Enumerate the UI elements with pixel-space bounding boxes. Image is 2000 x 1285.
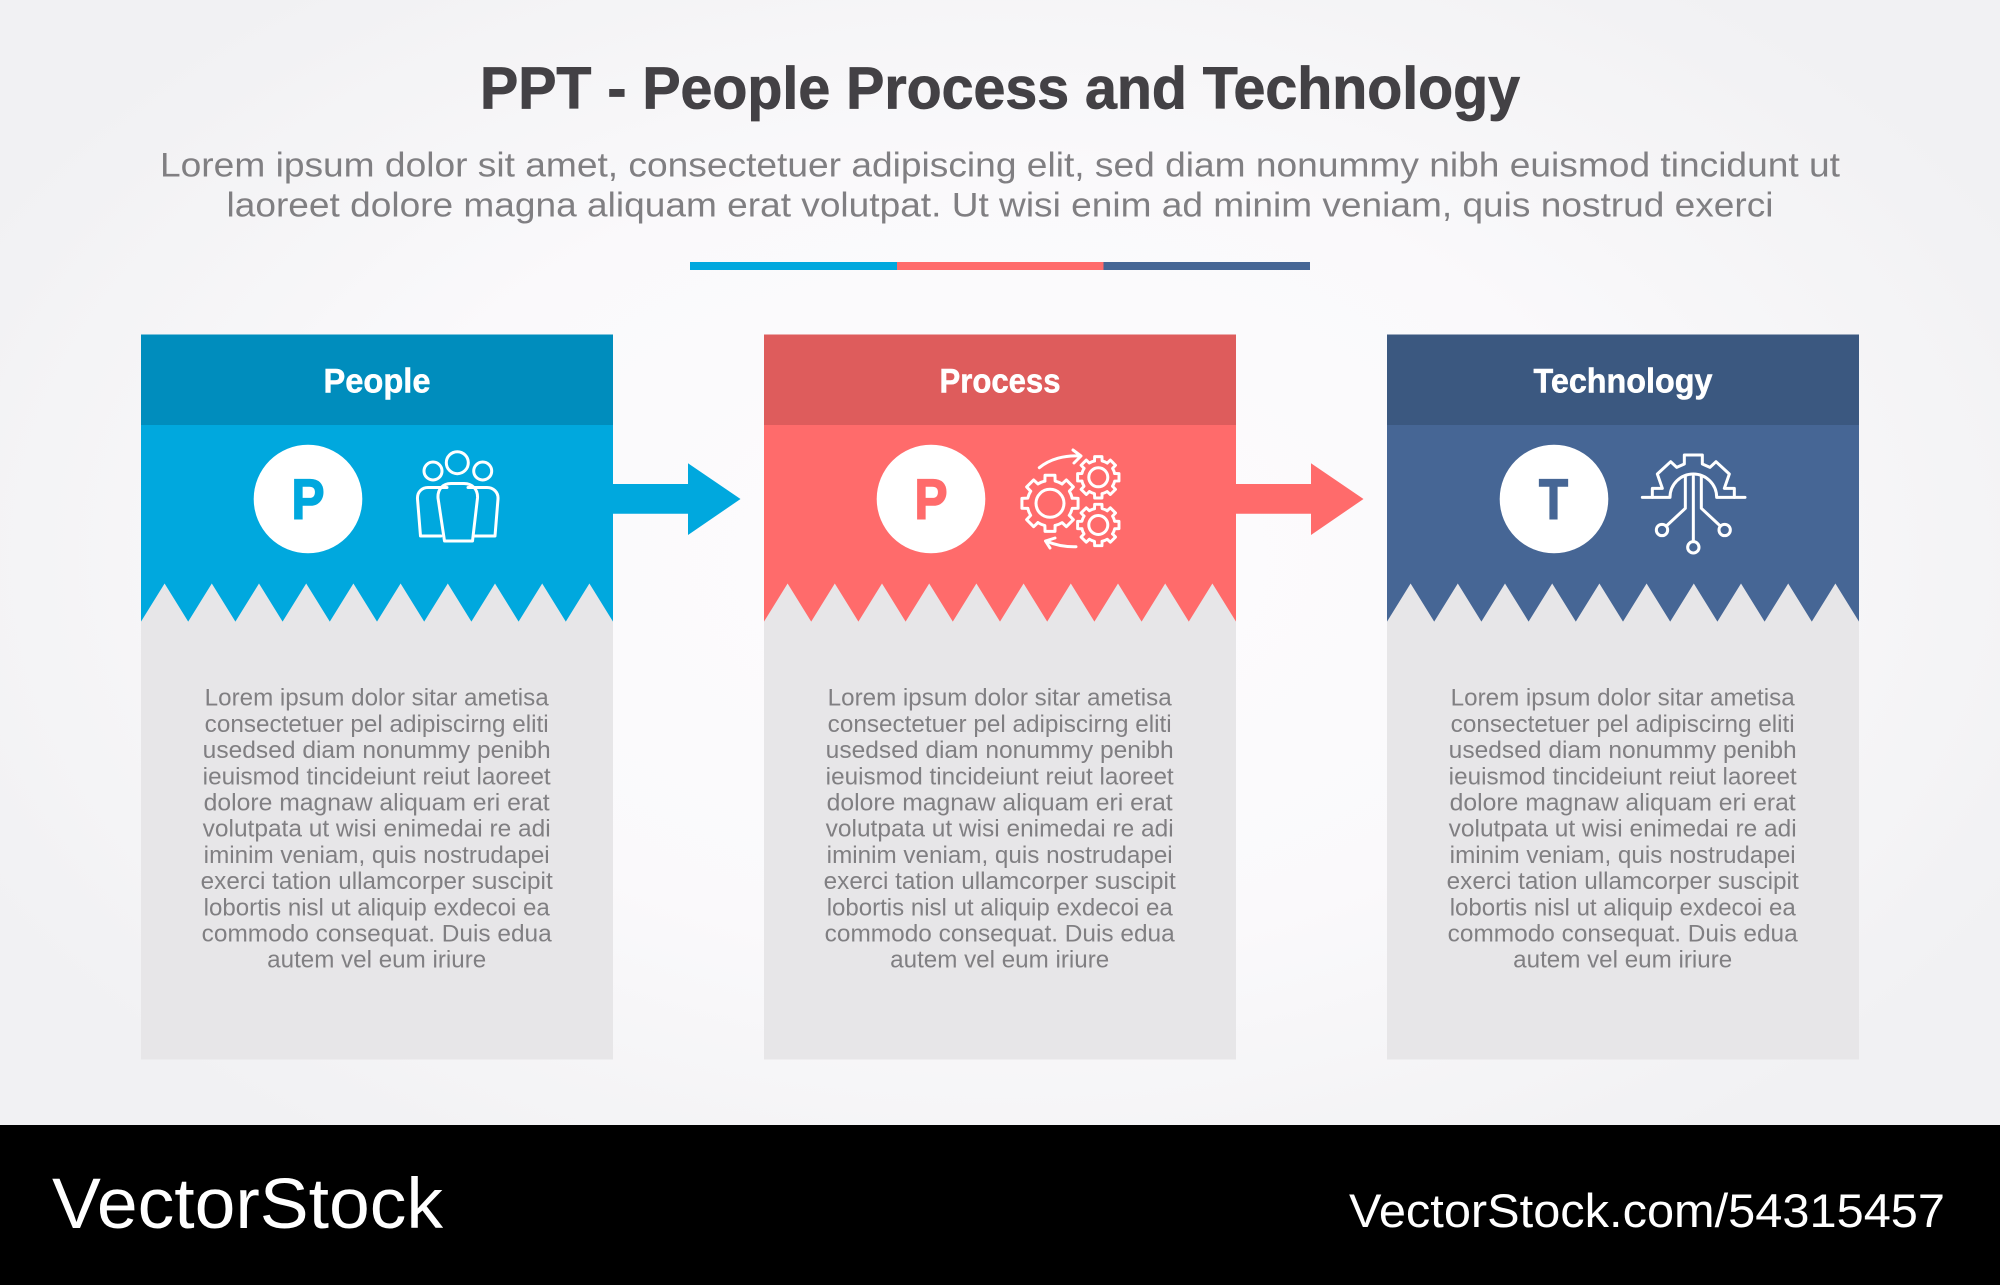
panel: technology: [1387, 334, 1859, 1060]
process body text: Lorem ipsum dolor sitar ametisa: [828, 685, 1172, 712]
people body text: dolore magnaw aliquam eri erat: [204, 790, 550, 816]
technology heading: Technology: [1534, 362, 1713, 400]
subtitle: [160, 146, 1841, 224]
technology header: [1387, 334, 1859, 425]
technology letter badge: [1500, 445, 1608, 553]
process body text: dolore magnaw aliquam eri erat: [827, 790, 1173, 816]
people body text: Lorem ipsum dolor sitar ametisa: [205, 685, 549, 712]
technology body text: consectetuer pel adipiscirng eliti: [1451, 711, 1795, 738]
people heading: People: [324, 362, 430, 400]
people letter badge: P: [292, 468, 324, 532]
technology body text: iminim veniam, quis nostrudapei: [1450, 842, 1796, 869]
people body text: volutpata ut wisi enimedai re adi: [203, 816, 551, 843]
technology body text: autem vel eum iriure: [1513, 947, 1732, 974]
people body text: commodo consequat. Duis edua: [202, 920, 552, 948]
process body text: autem vel eum iriure: [890, 947, 1109, 974]
technology body text: ieuismod tincideiunt reiut laoreet: [1449, 763, 1797, 790]
panel: process: [764, 334, 1236, 1060]
technology body text: exerci tation ullamcorper suscipit: [1447, 868, 1799, 895]
people letter badge: [254, 445, 362, 553]
technology body text: dolore magnaw aliquam eri erat: [1450, 790, 1796, 816]
people body text: exerci tation ullamcorper suscipit: [201, 868, 553, 895]
icon: people: [417, 452, 498, 541]
technology body text: usedsed diam nonummy penibh: [1449, 737, 1797, 764]
icon: gears: [1022, 450, 1119, 548]
technology letter badge: T: [1539, 468, 1568, 532]
process body text: volutpata ut wisi enimedai re adi: [826, 816, 1174, 843]
subtitle: laoreet dolore magna aliquam erat volutpat. Ut wisi enim ad minim veniam, quis nostrud exerci: [226, 186, 1773, 224]
people body text: ieuismod tincideiunt reiut laoreet: [203, 763, 551, 790]
icon: technology gear circuit: [1642, 455, 1745, 553]
footer bar: [0, 1125, 2000, 1285]
process letter badge: [877, 445, 985, 553]
process body text: usedsed diam nonummy penibh: [826, 737, 1174, 764]
process body text: ieuismod tincideiunt reiut laoreet: [826, 763, 1174, 790]
subtitle: Lorem ipsum dolor sit amet, consectetuer adipiscing elit, sed diam nonummy nibh euismod tincidunt ut: [160, 146, 1841, 184]
people body text: consectetuer pel adipiscirng eliti: [205, 711, 549, 738]
people body text: lobortis nisl ut aliquip exdecoi ea: [204, 894, 550, 921]
process body text: commodo consequat. Duis edua: [825, 920, 1175, 948]
process body text: lobortis nisl ut aliquip exdecoi ea: [827, 894, 1173, 921]
people header: [141, 334, 613, 425]
process body text: iminim veniam, quis nostrudapei: [827, 842, 1173, 869]
technology body text: lobortis nisl ut aliquip exdecoi ea: [1450, 894, 1796, 921]
technology body text: [1447, 685, 1799, 974]
process colour band with jagged edge: [764, 425, 1236, 622]
title: PPT - People Process and Technology: [480, 56, 1520, 122]
process body text: [824, 685, 1176, 974]
process body text: exerci tation ullamcorper suscipit: [824, 868, 1176, 895]
arrow: process to technology: [1236, 463, 1364, 535]
tricolor divider: [690, 262, 1310, 270]
process heading: Process: [940, 362, 1060, 400]
technology body text: commodo consequat. Duis edua: [1448, 920, 1798, 948]
technology body text: volutpata ut wisi enimedai re adi: [1449, 816, 1797, 843]
process body card: [764, 575, 1236, 1060]
technology colour band with jagged edge: [1387, 425, 1859, 622]
people body card: [141, 575, 613, 1060]
process letter badge: P: [914, 468, 948, 532]
process header: [764, 334, 1236, 425]
people body text: autem vel eum iriure: [267, 947, 486, 974]
footer logo text: VectorStock: [52, 1165, 444, 1244]
technology body card: [1387, 575, 1859, 1060]
panel: people: [141, 334, 613, 1060]
technology body text: Lorem ipsum dolor sitar ametisa: [1451, 685, 1795, 712]
process body text: consectetuer pel adipiscirng eliti: [828, 711, 1172, 738]
people body text: iminim veniam, quis nostrudapei: [204, 842, 550, 869]
people body text: [201, 685, 553, 974]
people colour band with jagged edge: [141, 425, 613, 622]
footer url text: VectorStock.com/54315457: [1349, 1184, 1945, 1237]
arrow: people to process: [613, 463, 740, 535]
people body text: usedsed diam nonummy penibh: [203, 737, 551, 764]
